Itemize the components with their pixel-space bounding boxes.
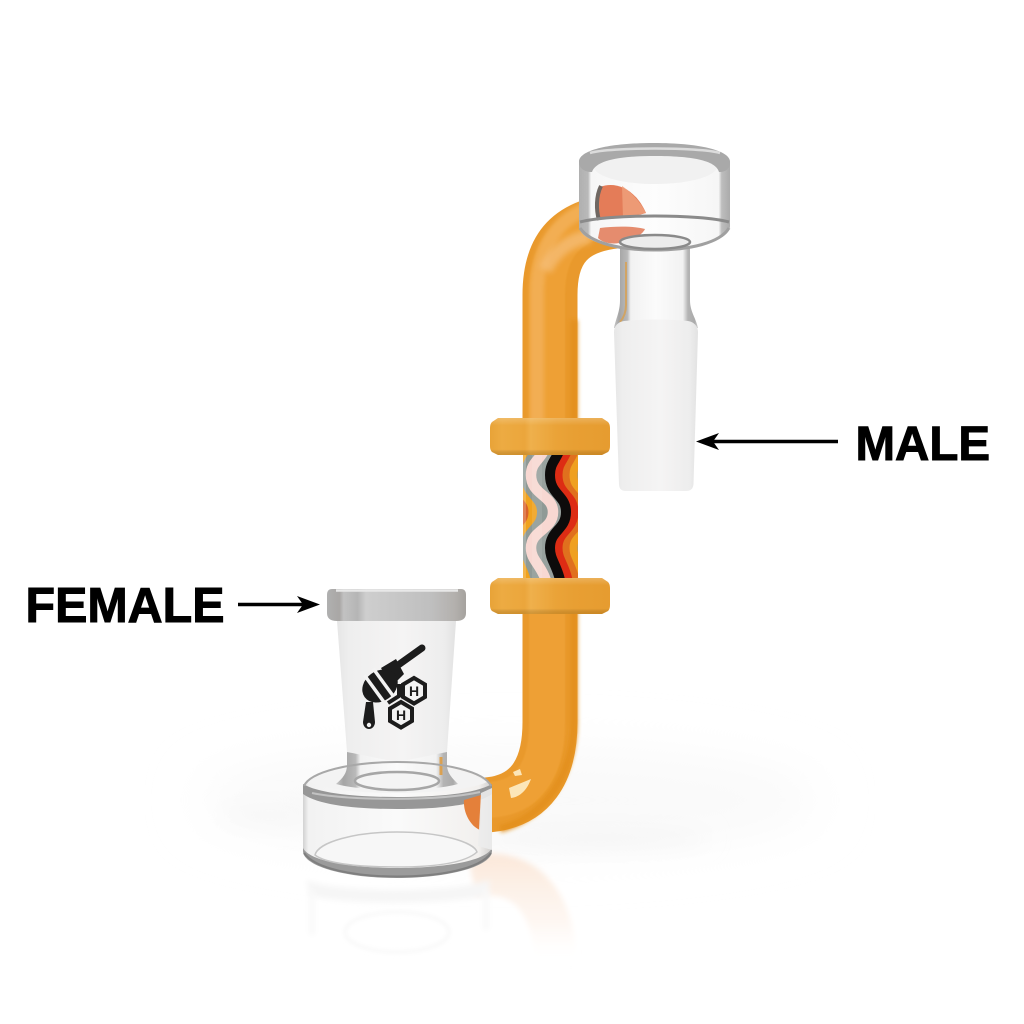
dish side glint <box>478 788 492 850</box>
bottom glass dish <box>303 752 492 878</box>
upper collar <box>490 418 610 455</box>
tube body <box>486 220 630 805</box>
hexagon upper letter: H <box>409 683 419 699</box>
dish top surface <box>310 765 487 793</box>
female joint <box>327 589 466 762</box>
tube lighter band <box>486 215 630 800</box>
tube lower highlight <box>530 610 544 722</box>
partial hexagon <box>388 684 399 703</box>
arrow: to female rim <box>238 596 320 613</box>
dish rim glint <box>312 792 480 799</box>
top banger bucket <box>579 143 730 250</box>
honey drip <box>363 702 375 729</box>
drop highlight <box>367 723 371 727</box>
male neck orange streak <box>620 262 626 322</box>
tube bend glow <box>545 236 590 270</box>
lower collar <box>490 578 610 614</box>
lower orange refraction <box>598 227 645 243</box>
hexagon upper <box>403 678 425 704</box>
orange glass highlight <box>622 186 646 218</box>
wig-wag section <box>523 455 578 578</box>
bucket top rim <box>579 143 730 172</box>
orange seen through glass <box>596 185 646 219</box>
dish bottom grey crescent <box>303 848 492 878</box>
glass edge on orange <box>597 186 601 220</box>
tube right edge shade <box>500 320 574 829</box>
dish body <box>303 762 492 877</box>
female rim top highlight <box>336 589 458 592</box>
dish rim arc outline <box>304 762 491 786</box>
arrow: to male joint <box>696 433 838 450</box>
hexagon lower letter: H <box>396 707 406 723</box>
dish inner base <box>315 832 477 867</box>
neck opening <box>355 772 439 790</box>
female frosted body <box>337 621 456 762</box>
icon: honey dipper logo <box>354 648 425 729</box>
dish bottom dark edge <box>304 853 491 876</box>
bucket base outer line <box>580 228 729 250</box>
orange seen through dish <box>464 795 481 830</box>
dipper handle <box>394 648 422 668</box>
dipper head <box>354 660 406 712</box>
orange tube <box>486 206 630 829</box>
female top rim <box>327 589 466 621</box>
tube specular spots <box>509 769 531 798</box>
floor shadow <box>200 750 820 850</box>
tube highlight band <box>537 206 596 430</box>
male clear neck <box>614 240 698 328</box>
label: MALE: MALE <box>856 418 990 471</box>
bucket neck opening <box>620 235 690 249</box>
bucket body <box>579 143 730 250</box>
label: FEMALE: FEMALE <box>26 579 224 633</box>
bucket rim highlight <box>590 148 720 153</box>
neck orange streak <box>440 757 442 775</box>
male frosted taper <box>614 320 698 491</box>
male joint <box>614 240 698 491</box>
hexagon lower <box>390 702 412 728</box>
dish neck <box>336 752 458 790</box>
dish grey rim band <box>303 784 492 809</box>
dipper neck <box>381 659 404 686</box>
floor reflection <box>306 874 556 965</box>
bucket inner opening <box>593 154 718 184</box>
bucket base rim line <box>580 216 729 222</box>
